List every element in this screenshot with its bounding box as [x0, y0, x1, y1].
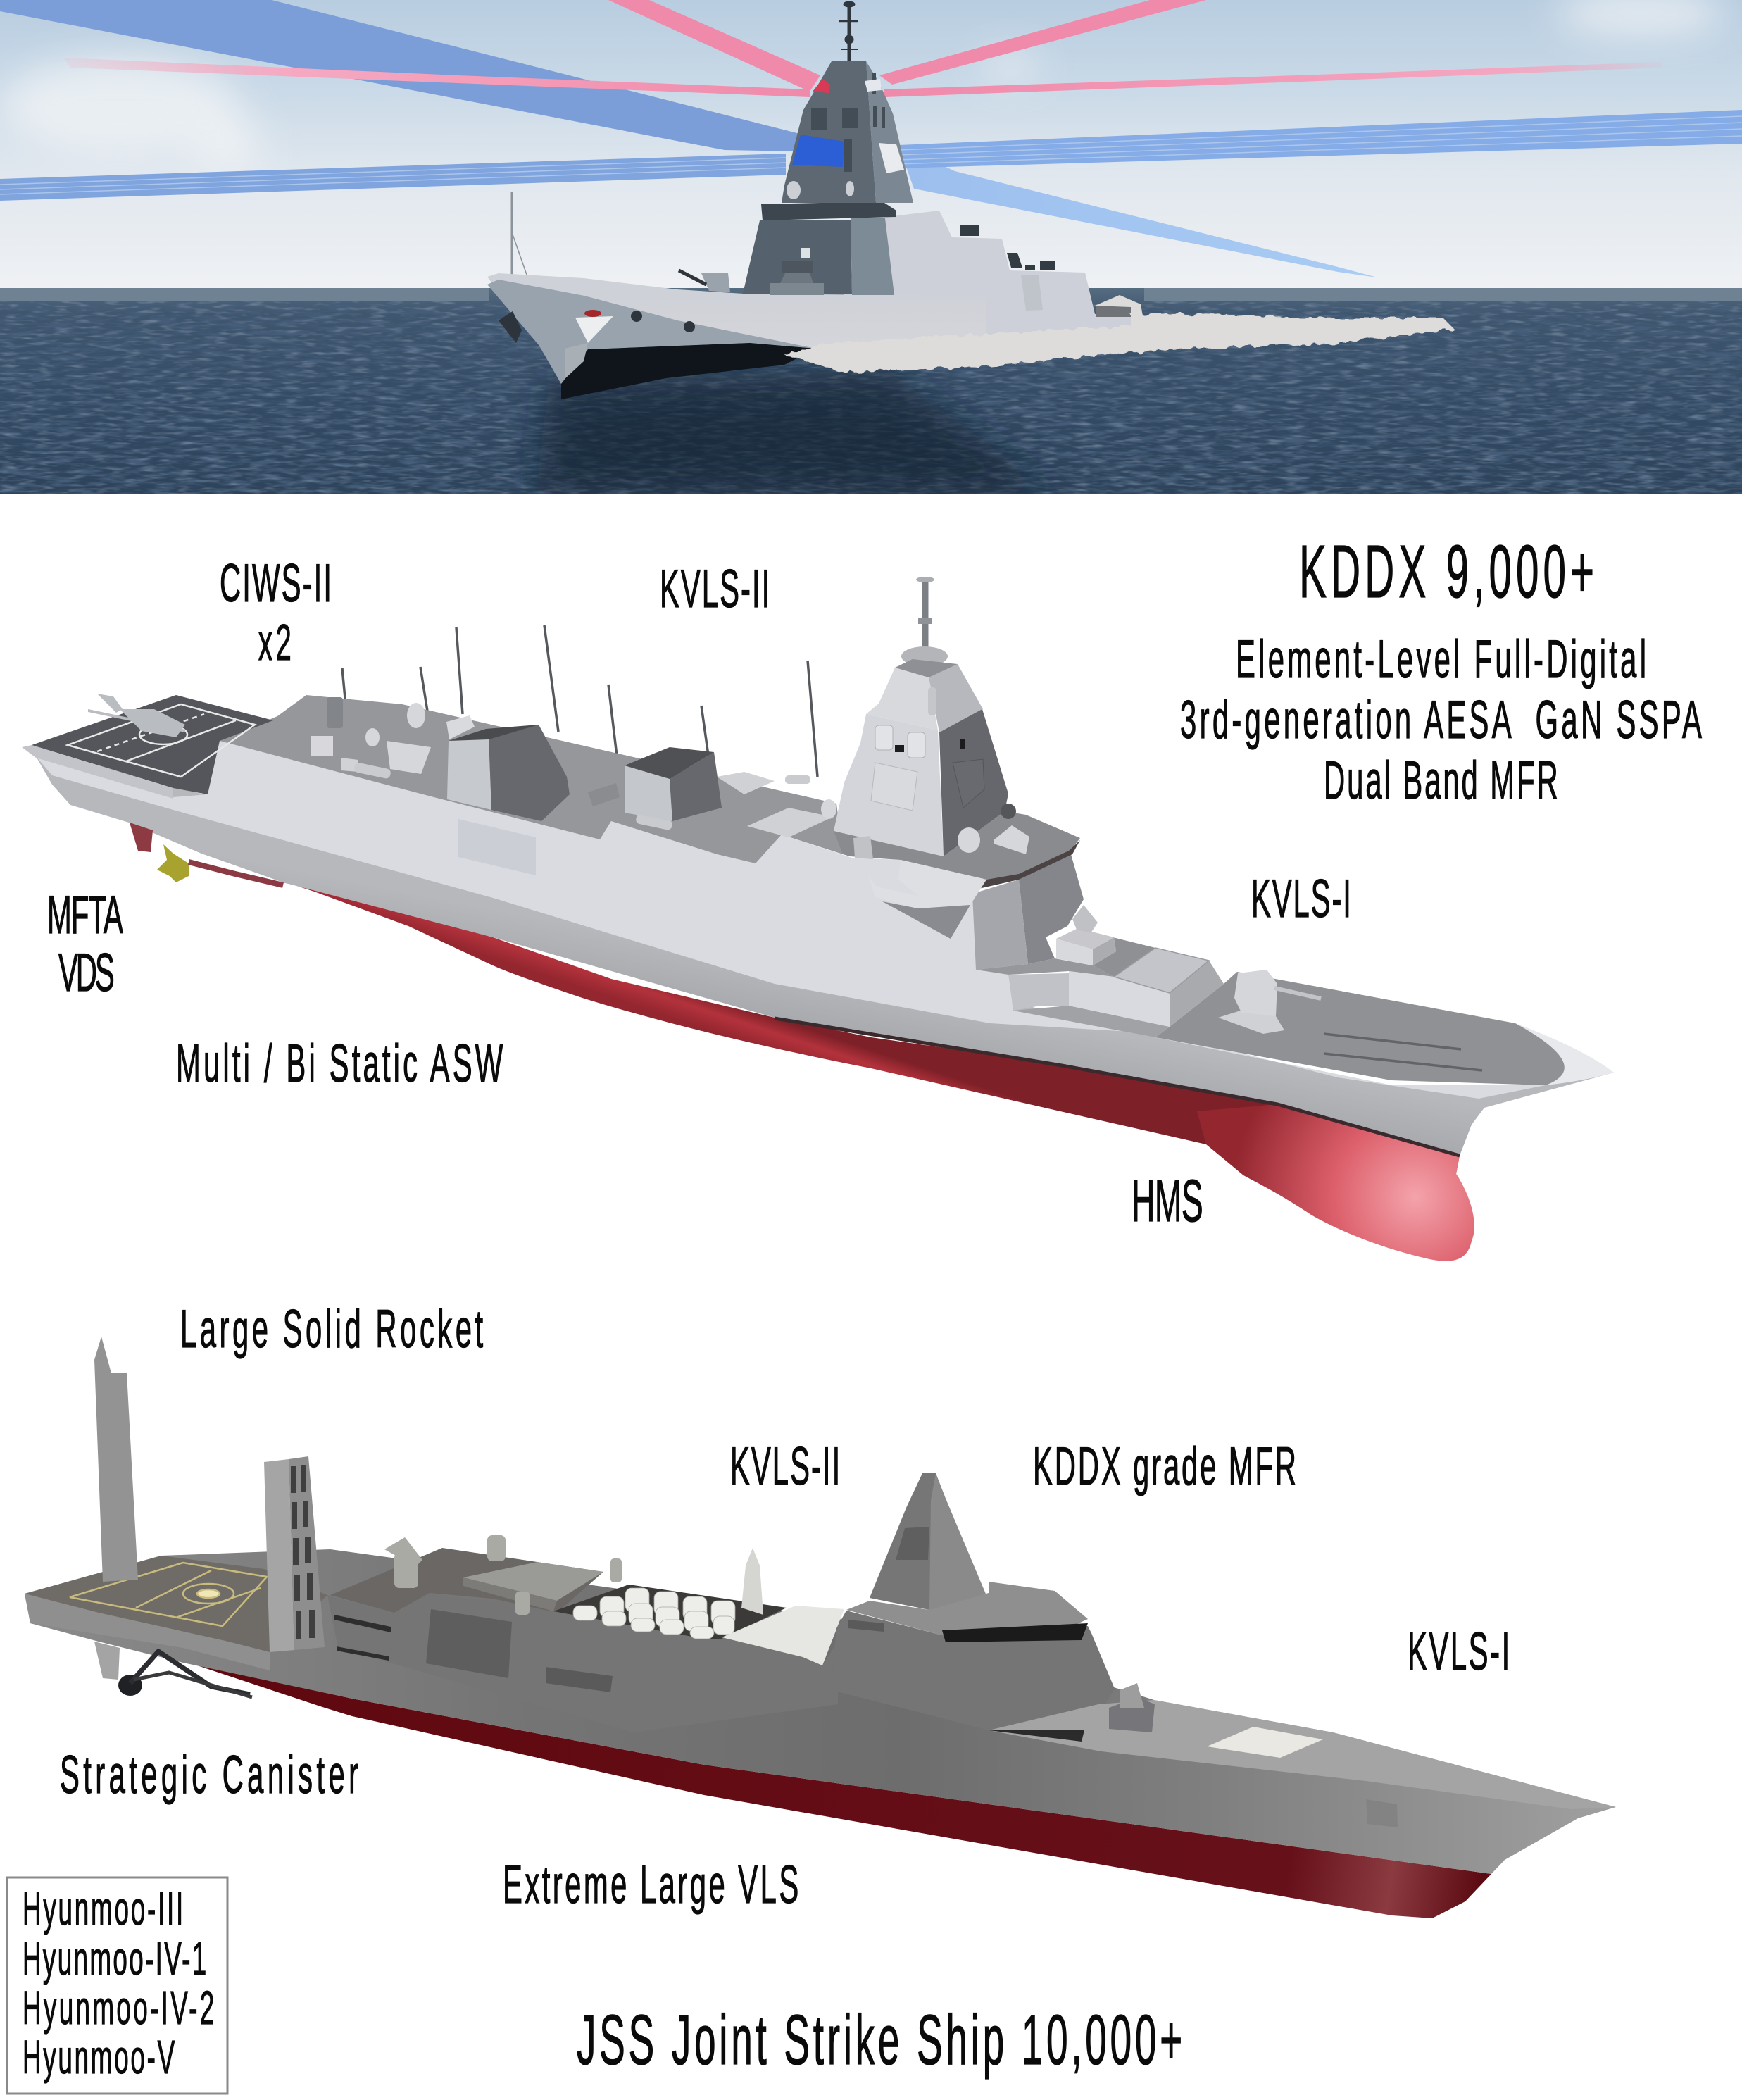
- hero ship: [487, 1, 1455, 399]
- side panel small: [546, 1667, 613, 1692]
- lifeboats: [353, 762, 810, 831]
- tower base front: [743, 220, 852, 294]
- VLS well: [553, 1585, 787, 1639]
- mast base: [341, 758, 358, 772]
- bridge wing: [868, 860, 986, 908]
- aft mounts: [960, 225, 1055, 270]
- white panel: [722, 1606, 844, 1665]
- KVLS-I right face: [1170, 961, 1224, 1027]
- fore superstructure: [831, 1611, 1115, 1730]
- label: Large Solid Rocket: Large Solid Rocket: [180, 1299, 483, 1358]
- propeller: [157, 844, 189, 882]
- gun turret: [1234, 970, 1277, 1016]
- fill under tower: [775, 858, 976, 972]
- radar line one: Element-Level Full-Digital: [1236, 629, 1646, 689]
- roof plate: [463, 1562, 603, 1601]
- red array overlay: [813, 79, 830, 93]
- platform: [846, 1582, 1088, 1635]
- main superstructure side: [36, 741, 1546, 1099]
- tower lower tier right: [939, 709, 1008, 856]
- tower panels: [871, 687, 984, 811]
- legend item III: Hyunmoo-III: [23, 1883, 183, 1935]
- bow lower plate: [565, 343, 588, 379]
- bow mast: [512, 192, 527, 275]
- bridge tower: [870, 1473, 989, 1610]
- helideck: [32, 695, 273, 794]
- red hull: [189, 1663, 1491, 1918]
- label: Extreme Large VLS: Extreme Large VLS: [503, 1854, 798, 1914]
- deck shadow: [989, 1730, 1084, 1742]
- KVLS-I front face: [1069, 971, 1170, 1027]
- aft superstructure: [844, 211, 1131, 335]
- legend item IV-1: Hyunmoo-IV-1: [23, 1933, 206, 1985]
- label: x2: x2: [258, 615, 292, 671]
- bow white arrow: [575, 316, 613, 343]
- aft roof: [330, 1548, 603, 1613]
- label: KDDX grade MFR: KDDX grade MFR: [1033, 1436, 1296, 1496]
- foredeck rim: [1515, 1023, 1614, 1085]
- main mast: [916, 577, 934, 651]
- foredeck: [1155, 972, 1614, 1085]
- aft side panel: [1021, 275, 1043, 311]
- wake: [784, 314, 1455, 373]
- antenna masts: [342, 625, 817, 835]
- black waterline: [775, 1018, 1460, 1156]
- label: ASW: Multi / Bi Static ASW: [176, 1033, 503, 1093]
- aft domes: [365, 703, 425, 746]
- deck strip to KVLS: [1067, 926, 1155, 977]
- ship reflection: [535, 370, 1056, 494]
- anchor chains: [1324, 1034, 1482, 1070]
- side panel: [426, 1609, 512, 1678]
- hull hatch: [1366, 1799, 1398, 1827]
- clouds: [0, 0, 1725, 176]
- tower collar top: [895, 659, 958, 677]
- roof plate face: [463, 1577, 557, 1611]
- tower top tier right: [929, 664, 983, 732]
- ship: JSS 3D model: [25, 1337, 1616, 1918]
- bow side shade: [487, 280, 816, 384]
- block one light face: [447, 736, 491, 810]
- heli markings: [70, 1563, 267, 1626]
- forward side structure: [1008, 973, 1069, 1011]
- horizon haze: [0, 288, 489, 301]
- ship: KDDX 3D model: [22, 577, 1614, 1261]
- legend item IV-2: Hyunmoo-IV-2: [23, 1982, 214, 2035]
- horizon haze right: [1144, 288, 1742, 301]
- CIWS block: [1056, 905, 1116, 965]
- platform dark rim: [972, 840, 1080, 890]
- labels: radar description: [1180, 629, 1702, 810]
- radar line two: 3rd-generation AESA GaN SSPA: [1180, 689, 1702, 749]
- label: KVLS-I upper: KVLS-I: [1251, 868, 1351, 928]
- white canisters: [573, 1588, 735, 1639]
- panel: hero photo of ship at sea: [0, 0, 1742, 494]
- label: HMS: HMS: [1132, 1169, 1203, 1235]
- gun base: [1218, 1009, 1284, 1034]
- shaft: [189, 862, 283, 885]
- platform mounts: [821, 799, 1029, 859]
- label: MFTA: MFTA: [47, 885, 123, 944]
- block two dark face: [670, 752, 722, 821]
- canister tower: [264, 1456, 325, 1652]
- small mount: [588, 783, 620, 806]
- bridge right face: [1019, 854, 1084, 964]
- legend box: Hyunmoo missiles: [7, 1877, 227, 2094]
- sea: [0, 288, 1742, 494]
- aft sensor box: [311, 736, 333, 756]
- deck hatches: [717, 772, 833, 837]
- mast: [839, 1, 858, 61]
- side panel: [458, 819, 536, 875]
- stern spray: [1095, 295, 1144, 331]
- white beam glow: [865, 79, 882, 92]
- labels: JSS title: JSS Joint Strike Ship 10,000+: [577, 2001, 1182, 2080]
- dark dome: [1001, 804, 1016, 819]
- black stripe: [942, 1623, 1088, 1642]
- label: CIWS: CIWS-II: [220, 553, 332, 613]
- radar beams: blue: [0, 0, 1742, 277]
- helideck markings: [68, 704, 255, 777]
- block one top plate: [446, 715, 475, 739]
- aft hatch block: [387, 741, 431, 774]
- vents: [334, 1615, 391, 1661]
- KVLS-I cells: [1114, 948, 1209, 993]
- midship deck: [220, 695, 843, 863]
- tower spire right: [866, 61, 913, 203]
- bulbous bow: [1197, 1104, 1474, 1261]
- tower lower tier left: [834, 714, 944, 856]
- wing shadow: [882, 901, 970, 939]
- stern ledge: [1096, 304, 1131, 317]
- hero hull: [487, 273, 844, 384]
- aft superstructure wall: [327, 1593, 838, 1732]
- legend item V: Hyunmoo-V: [23, 2032, 175, 2084]
- tower base right: [851, 218, 894, 295]
- blue array panel: [792, 135, 844, 167]
- radar line three: Dual Band MFR: [1324, 750, 1558, 810]
- canister tall: [94, 1337, 138, 1582]
- foredeck: [989, 1700, 1616, 1809]
- label: KVLS-II lower: KVLS-II: [730, 1436, 840, 1496]
- tower upper panels: [811, 73, 885, 172]
- transom: [25, 1594, 270, 1670]
- radar beams: pink: [63, 0, 1662, 97]
- deck mounts: [384, 1535, 622, 1615]
- deck behind bridge: [976, 958, 1114, 977]
- label: VDS: VDS: [58, 942, 115, 1002]
- propeller and struts: [118, 1651, 252, 1697]
- hull side: [25, 1549, 1616, 1874]
- white pad: [1207, 1727, 1323, 1758]
- gun barrel: [1274, 988, 1321, 999]
- rudder: [94, 1642, 120, 1680]
- label: Strategic Canister: Strategic Canister: [60, 1744, 358, 1804]
- label: KVLS-I lower: KVLS-I: [1408, 1621, 1510, 1681]
- block one roof: [449, 725, 539, 741]
- sky: [0, 0, 1742, 289]
- tower domes: [787, 181, 854, 199]
- labels: KDDX title: KDDX 9,000+: [1299, 531, 1594, 614]
- tower collar: [761, 201, 896, 220]
- aft CIWS: [327, 697, 343, 728]
- tower base vents: [848, 1620, 884, 1632]
- rudder: [130, 823, 153, 852]
- label: KVLS-II upper: KVLS-II: [660, 558, 770, 618]
- stern rail strip: [22, 745, 173, 799]
- wave texture light: [0, 301, 1742, 494]
- block two roof: [625, 747, 714, 779]
- bow details: [499, 310, 695, 343]
- tower CIWS: [770, 248, 824, 295]
- legend border: [7, 1877, 227, 2094]
- tower spire front: [782, 61, 876, 203]
- helicopter: [88, 694, 185, 737]
- CIWS fore: [1109, 1683, 1155, 1732]
- tower top tier left: [866, 668, 938, 730]
- missile on deck: [741, 1548, 763, 1615]
- hull side band: [36, 756, 1614, 1156]
- red underwater hull: [267, 876, 1473, 1260]
- bridge left face: [972, 880, 1028, 970]
- stern deck: [25, 1556, 327, 1652]
- white array panel: [879, 143, 904, 173]
- wave texture dark: [0, 301, 1742, 494]
- deck gun: [679, 270, 730, 292]
- walkway: [1013, 1006, 1170, 1037]
- block two light face: [625, 765, 672, 821]
- bridge platform: [834, 811, 1080, 880]
- tower right face: [929, 1473, 989, 1610]
- block one dark face: [489, 725, 570, 821]
- tower top ring: [901, 646, 948, 666]
- tower panel: [896, 1527, 929, 1560]
- bow black shadow: [561, 343, 816, 399]
